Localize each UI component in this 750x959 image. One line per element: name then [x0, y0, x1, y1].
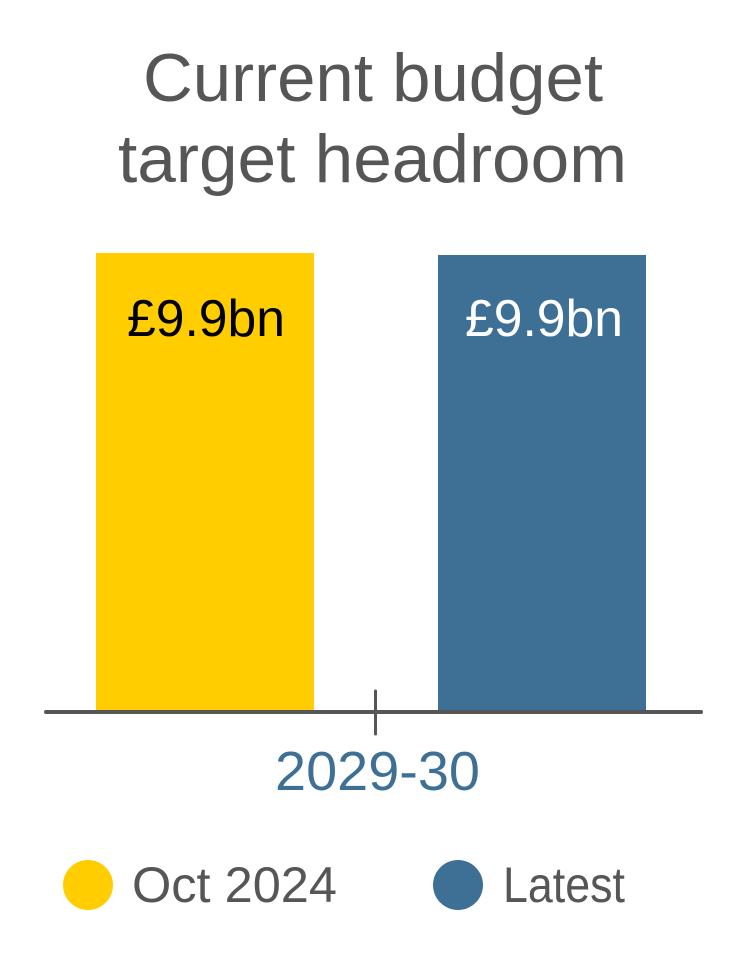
bar: Latest	[438, 255, 646, 712]
legend: Latest: Latest	[503, 857, 625, 913]
title: Current budget	[143, 40, 603, 116]
legend: Oct 2024: Oct 2024	[132, 857, 337, 913]
x axis label: 2029-30	[275, 740, 480, 802]
legend: Latest	[433, 857, 625, 913]
title	[118, 40, 627, 197]
bar: Oct 2024	[96, 253, 314, 712]
title: target headroom	[118, 121, 627, 197]
bar value: Latest: £9.9bn	[465, 290, 623, 348]
bar value: Oct 2024: £9.9bn	[127, 290, 285, 348]
x axis	[46, 691, 701, 734]
